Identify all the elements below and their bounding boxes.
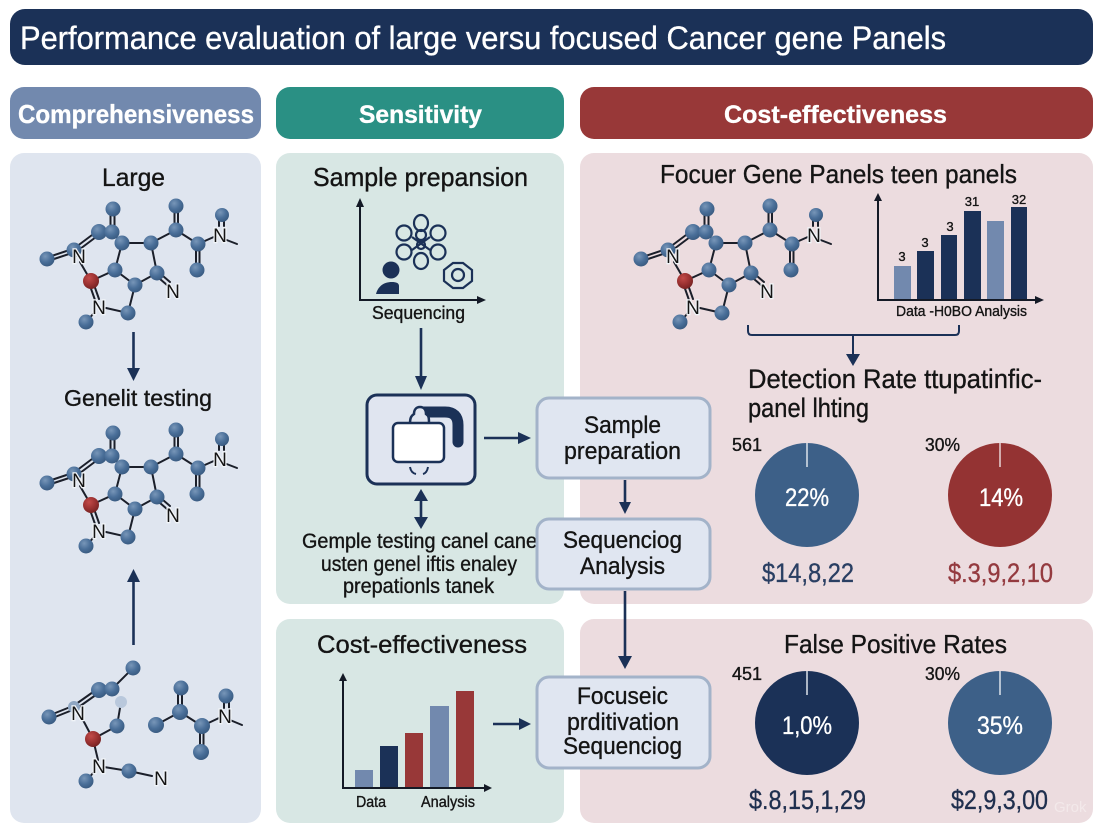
icon: molecule right: N [760,282,774,303]
bar chart: data analysis: 31 [965,194,979,209]
icon: molecule middle: N [213,450,227,471]
pie chart: 1,0% [732,664,866,815]
arrow: to sample icon [415,328,427,390]
icon: molecule middle [40,422,237,554]
heading: Sensitivity: Sensitivity [359,101,482,129]
bar chart: data analysis: 3 [898,249,906,264]
bar chart: data analysis: 3 [946,219,954,234]
text: Genelit testing: Genelit testing [64,385,212,411]
heading: Cost-effectiveness: Cost-effectiveness [317,631,527,659]
pie chart: 14%: 30% [925,435,960,455]
pie chart: 1,0%: $.8,15,1,29 [749,785,866,815]
icon: molecule upper: N [72,247,86,268]
arrow: sequencing to focused box [618,591,632,669]
pie chart: 35%: 35% [977,712,1023,740]
icon: molecule upper: N [166,282,180,303]
pie chart: 35%: $2,9,3,00 [951,785,1048,815]
heading: False Positive Rates: False Positive Rates [784,629,1007,659]
pie chart: 22%: $14,8,22 [762,558,854,588]
icon: molecule fragments: N [218,707,232,728]
pie chart: 35% [925,664,1052,815]
heading: Comprehensiveness [10,87,261,139]
icon: molecule fragments: N [154,769,168,790]
icon: molecule right: N [666,247,680,268]
icon: molecule upper: N [92,298,106,319]
bar chart: data analysis: 3 [921,235,929,250]
heading: Comprehensiveness: Comprehensiveness [18,99,254,129]
panel: cost-effectiveness chart [276,619,564,823]
icon: molecule middle: N [166,506,180,527]
box: sequencing analysis: Sequenciog [563,527,682,554]
arrow: up [127,569,140,645]
box: sample preparation: Sample [584,412,661,439]
text: testing description: Gemple testing canel cane [302,530,537,553]
heading: detection rate [748,364,1042,423]
chart: sequencing diagram [356,198,486,304]
box: focused sequencing: Sequenciog [563,733,682,760]
icon: molecule fragments: N [71,704,85,725]
heading: Sample prepansion: Sample prepansion [313,162,528,192]
heading: Large: Large [102,164,165,192]
heading: Focuer Gene Panels: Focuer Gene Panels teen panels [660,159,1017,189]
pie chart: 22%: 22% [785,484,829,512]
box: sample preparation [537,398,710,478]
pie chart: 14%: 14% [979,484,1023,512]
icon: molecule right [634,198,831,330]
box: focused sequencing [537,677,710,768]
pie chart: 1,0%: 451 [732,664,762,684]
heading: Cost-effectiveness: Cost-effectiveness [724,101,947,129]
arrow: bracket to detection rate [748,325,959,366]
icon: molecule right: N [686,298,700,319]
panel: false positive rates [580,619,1093,823]
text: testing description [302,530,537,598]
box: focused sequencing: Focuseic [577,683,668,710]
icon: molecule fragments [42,660,242,790]
icon: molecule fragments: N [92,757,106,778]
panel: sample preparation [276,153,564,604]
bar chart: data analysis [874,192,1044,320]
arrow: down [127,332,140,381]
box: sequencing analysis [537,519,710,589]
arrow: double vertical [414,489,428,529]
panel: large panels column [10,153,261,823]
arrow: preparation to sequencing [619,480,631,514]
bar chart: data analysis: Data -H0BO Analysis [896,303,1027,320]
bar chart: cost [339,673,492,811]
text: Sequencing: Sequencing [372,303,465,323]
heading: detection rate: panel lhting [748,393,869,423]
pie chart: 22%: 561 [732,435,762,455]
pie chart: 14% [925,435,1053,588]
icon: molecule middle: N [92,522,106,543]
title banner: Performance evaluation of large versu focused Cancer gene Panels [20,20,946,56]
bar chart: data analysis: 32 [1012,192,1026,207]
watermark: Grok: Grok [1054,799,1087,816]
text: testing description: usten genel iftis enaley [321,553,517,576]
arrow: icon to sample preparation [484,432,531,444]
heading: Cost-effectiveness [580,87,1093,139]
box: focused sequencing: prditivation [567,709,679,736]
panel: focused gene panels [580,153,1093,604]
bar chart: cost: Data [356,794,386,811]
heading: Sensitivity [276,87,564,139]
text: testing description: prepationls tanek [343,575,494,598]
box: sequencing analysis: Analysis [580,553,665,580]
icon: molecule right: N [807,226,821,247]
icon: sample case [367,395,475,484]
icon: molecule upper [40,198,237,330]
pie chart: 1,0%: 1,0% [782,712,832,740]
icon: molecule upper: N [213,226,227,247]
box: sample preparation: preparation [564,438,681,465]
bar chart: cost: Analysis [421,794,475,811]
pie chart: 22% [732,435,859,588]
pie chart: 14%: $.3,9,2,10 [948,558,1053,588]
title banner [10,9,1093,65]
pie chart: 35%: 30% [925,664,960,684]
arrow: chart to focused box [493,718,531,730]
icon: molecule middle: N [72,471,86,492]
heading: detection rate: Detection Rate ttupatinfic- [748,364,1042,394]
